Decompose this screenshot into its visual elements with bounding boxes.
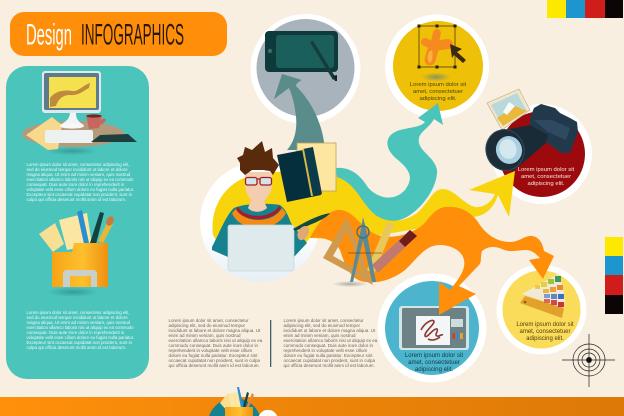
title banner: Design xyxy=(26,18,72,52)
text column one: qui officia deserunt mollit anim id est laborum. xyxy=(168,363,260,368)
caption: yellow circle: amet, consectetuer xyxy=(413,89,463,95)
caption: red circle: adipiscing elit. xyxy=(527,181,565,187)
icon: dark notebook xyxy=(277,147,322,202)
text block: sidebar bottom: Lorem ipsum dolor sit amet, consectetur adipiscing elit, xyxy=(26,310,130,315)
arrow: yellow stream xyxy=(212,171,515,255)
circle: grey tablet xyxy=(250,14,360,124)
caption: yellow circle: Lorem ipsum dolor sit xyxy=(410,82,467,88)
arrow: teal stream xyxy=(336,103,443,221)
person illustration xyxy=(212,141,330,271)
text column one: incididunt ut labore et dolore magna aliqua. Ut xyxy=(168,328,261,333)
text column two: exercitation ullamco laboris nisi ut aliquip ex ea xyxy=(284,338,378,343)
text column one: commodo consequat. Duis aute irure dolor in xyxy=(168,343,259,348)
text block: sidebar bottom: Excepteur sint occaecat cupidatat non proident, sunt in xyxy=(26,340,133,345)
panel: teal sidebar xyxy=(6,66,149,379)
text column two: adipiscing elit, sed do eiusmod tempor xyxy=(284,323,361,328)
white badge circle xyxy=(259,410,277,416)
arrow: orange stream xyxy=(310,207,554,315)
caption: yellow circle: adipiscing elit. xyxy=(419,96,457,102)
text block: sidebar bottom: voluptate velit esse cillum dolore eu fugiat nulla pariatur. xyxy=(26,335,134,340)
text column two: qui officia deserunt mollit anim id est laborum. xyxy=(284,363,375,368)
text column one: occaecat cupidatat non proident, sunt in culpa xyxy=(168,358,261,363)
icon: drawing tablet screen xyxy=(399,306,469,350)
text block: sidebar bottom: sed do eiusmod tempor incididunt ut labore et dolore xyxy=(26,315,128,320)
text block: sidebar top: consequat. Duis aute irure dolor in reprehenderit in xyxy=(26,182,125,187)
text block: sidebar top xyxy=(26,162,134,202)
icon: graphics tablet xyxy=(265,31,338,81)
title banner xyxy=(10,12,227,56)
laptop xyxy=(228,225,294,271)
text column two xyxy=(284,318,378,368)
colour swatches top xyxy=(547,0,623,18)
circle: red with camera xyxy=(492,104,592,204)
caption: light yellow circle: adipiscing elit. xyxy=(526,336,564,342)
caption: light yellow circle xyxy=(516,322,574,342)
circle: yellow with splat xyxy=(385,14,489,118)
icon: splat with selection cursor xyxy=(418,24,466,82)
text block: sidebar top: exercitation ullamco laboris nisi ut aliquip ex ea commodo xyxy=(26,177,134,182)
text column one: adipiscing elit, sed do eiusmod tempor xyxy=(168,323,246,328)
colour swatches right xyxy=(605,237,623,314)
icon: camera with photo xyxy=(481,89,578,175)
text block: sidebar top: Lorem ipsum dolor sit amet, consectetur adipiscing elit, xyxy=(26,162,130,167)
caption: blue circle xyxy=(405,352,463,373)
sweater xyxy=(212,204,307,258)
circle: blue with tablet xyxy=(378,274,486,382)
icon: registration target xyxy=(562,334,615,387)
caption: blue circle: adipiscing elit. xyxy=(415,366,453,373)
text block: sidebar bottom: magna aliqua. Ut enim ad minim veniam, quis nostrud xyxy=(26,320,131,325)
text block: sidebar top: voluptate velit esse cillum dolore eu fugiat nulla pariatur. xyxy=(26,187,134,192)
caption: blue circle: amet, consectetuer xyxy=(408,359,460,366)
caption: red circle: amet, consectetuer xyxy=(521,174,571,180)
bottom bar xyxy=(0,387,624,416)
text column one: exercitation ullamco laboris nisi ut aliquip ex ea xyxy=(168,338,263,343)
text column two: incididunt ut labore et dolore magna aliqua. Ut xyxy=(284,328,376,333)
text block: sidebar bottom xyxy=(26,310,134,350)
text column two: occaecat cupidatat non proident, sunt in culpa xyxy=(284,358,376,363)
icon: yellow paper xyxy=(297,143,336,191)
icon: folder with pencils xyxy=(39,210,115,297)
arrow: grey teal xyxy=(274,74,325,150)
icon: drafting tools xyxy=(323,217,417,287)
glasses xyxy=(246,178,272,185)
text column one xyxy=(168,318,263,368)
icon: mini folder badge xyxy=(209,387,260,416)
text block: sidebar top: magna aliqua. Ut enim ad minim veniam, quis nostrud xyxy=(26,172,131,177)
caption: red circle: Lorem ipsum dolor sit xyxy=(518,167,575,173)
text column two: dolore eu fugiat nulla pariatur. Excepteur sint xyxy=(284,353,373,358)
text column one: Lorem ipsum dolor sit amet, consectetur xyxy=(168,318,249,323)
title banner: INFOGRAPHICS xyxy=(81,18,184,52)
circle: light yellow with swatches xyxy=(496,264,586,354)
text block: sidebar bottom: consequat. Duis aute irure dolor in reprehenderit in xyxy=(26,330,125,335)
neck and face xyxy=(245,172,272,212)
text column two: Lorem ipsum dolor sit amet, consectetur xyxy=(284,318,364,323)
icon: colour swatch fan xyxy=(520,274,565,318)
text column two: commodo consequat. Duis aute irure dolor in xyxy=(284,343,374,348)
text block: sidebar top: sed do eiusmod tempor incididunt ut labore et dolore xyxy=(26,167,128,172)
hair xyxy=(237,141,279,175)
text column two: enim ad minim veniam, quis nostrud xyxy=(284,333,356,338)
caption: blue circle: Lorem ipsum dolor sit xyxy=(405,352,463,359)
text column one: reprehenderit in voluptate velit esse cillum xyxy=(168,348,253,353)
text block: sidebar top: culpa qui officia deserunt mollit anim id est laborum. xyxy=(26,197,126,202)
column divider xyxy=(270,320,271,367)
text block: sidebar top: Excepteur sint occaecat cupidatat non proident, sunt in xyxy=(26,192,133,197)
caption: red circle xyxy=(518,167,575,187)
hand and stylus xyxy=(293,213,330,240)
text block: sidebar bottom: culpa qui officia deserunt mollit anim id est laborum. xyxy=(26,345,126,350)
text column two: reprehenderit in voluptate velit esse cillum xyxy=(284,348,368,353)
caption: yellow circle xyxy=(410,82,467,102)
text column one: enim ad minim veniam, quis nostrud xyxy=(168,333,241,338)
icon: desktop workspace xyxy=(22,71,137,156)
caption: light yellow circle: Lorem ipsum dolor sit xyxy=(516,322,574,328)
text block: sidebar bottom: exercitation ullamco laboris nisi ut aliquip ex ea commodo xyxy=(26,325,134,330)
caption: light yellow circle: amet, consectetuer xyxy=(519,329,571,335)
text column one: dolore eu fugiat nulla pariatur. Excepteur sint xyxy=(168,353,258,358)
circle: person backdrop xyxy=(200,162,320,282)
